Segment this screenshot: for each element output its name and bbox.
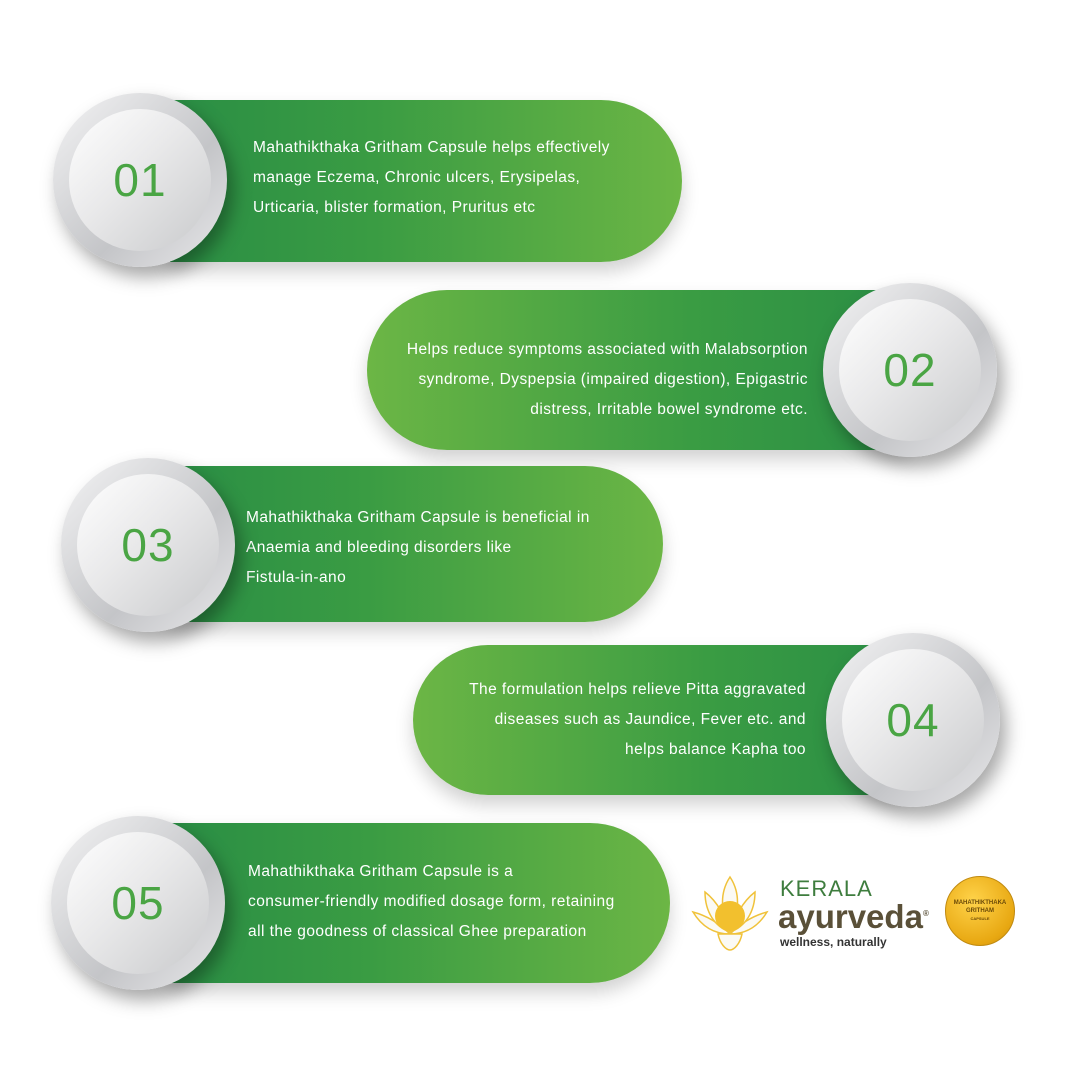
icon: circle 01: 01 bbox=[113, 154, 167, 206]
icon: circle 03: 03 bbox=[121, 519, 175, 571]
text: item 05: Mahathikthaka Gritham Capsule is a bbox=[248, 863, 513, 880]
text: item 01 bbox=[253, 139, 610, 216]
panel: item 01 bbox=[170, 100, 682, 262]
panel: item 02 bbox=[367, 290, 907, 450]
icon: circle 04: 04 bbox=[886, 694, 940, 746]
panel: item 05 bbox=[170, 823, 670, 983]
badge: product seal: MAHATHIKTHAKA bbox=[954, 900, 1006, 906]
badge: product seal bbox=[945, 876, 1015, 946]
icon: circle 05 bbox=[51, 816, 225, 990]
text: item 02: Helps reduce symptoms associated with Malabsorption bbox=[407, 341, 808, 358]
text: item 03 bbox=[246, 509, 590, 586]
icon: lotus bbox=[692, 876, 768, 951]
text: item 01: Urticaria, blister formation, Pruritus etc bbox=[253, 199, 535, 216]
icon: circle 01 bbox=[53, 93, 227, 267]
text: item 04 bbox=[469, 681, 806, 758]
text: item 02: distress, Irritable bowel syndrome etc. bbox=[530, 401, 808, 418]
text: item 03: Anaemia and bleeding disorders like bbox=[246, 539, 512, 556]
text: brand name: KERALA bbox=[780, 876, 873, 901]
text: item 04: diseases such as Jaundice, Fever etc. and bbox=[495, 711, 806, 728]
panel: item 04 bbox=[413, 645, 903, 795]
badge: product seal: GRITHAM bbox=[966, 908, 994, 914]
text: item 03: Mahathikthaka Gritham Capsule is beneficial in bbox=[246, 509, 590, 526]
text: item 05: consumer-friendly modified dosage form, retaining bbox=[248, 893, 615, 910]
icon: circle 04 bbox=[826, 633, 1000, 807]
text: item 01: Mahathikthaka Gritham Capsule helps effectively bbox=[253, 139, 610, 156]
text: item 02: syndrome, Dyspepsia (impaired digestion), Epigastric bbox=[418, 371, 808, 388]
text: item 04: The formulation helps relieve Pitta aggravated bbox=[469, 681, 806, 698]
text: item 03: Fistula-in-ano bbox=[246, 569, 346, 586]
text: item 05 bbox=[248, 863, 615, 940]
logo: Kerala Ayurveda bbox=[692, 876, 929, 951]
icon: circle 02 bbox=[823, 283, 997, 457]
text: item 01: manage Eczema, Chronic ulcers, Erysipelas, bbox=[253, 169, 580, 186]
text: item 05: all the goodness of classical Ghee preparation bbox=[248, 923, 587, 940]
logo: Kerala Ayurveda: ayurveda® bbox=[778, 898, 929, 935]
badge: product seal: CAPSULE bbox=[970, 916, 990, 921]
icon: circle 03 bbox=[61, 458, 235, 632]
text: item 04: helps balance Kapha too bbox=[625, 741, 806, 758]
text: item 02 bbox=[407, 341, 808, 418]
icon: circle 05: 05 bbox=[111, 877, 165, 929]
panel: item 03 bbox=[170, 466, 663, 622]
icon: circle 02: 02 bbox=[883, 344, 937, 396]
logo: Kerala Ayurveda: wellness, naturally bbox=[780, 935, 887, 949]
